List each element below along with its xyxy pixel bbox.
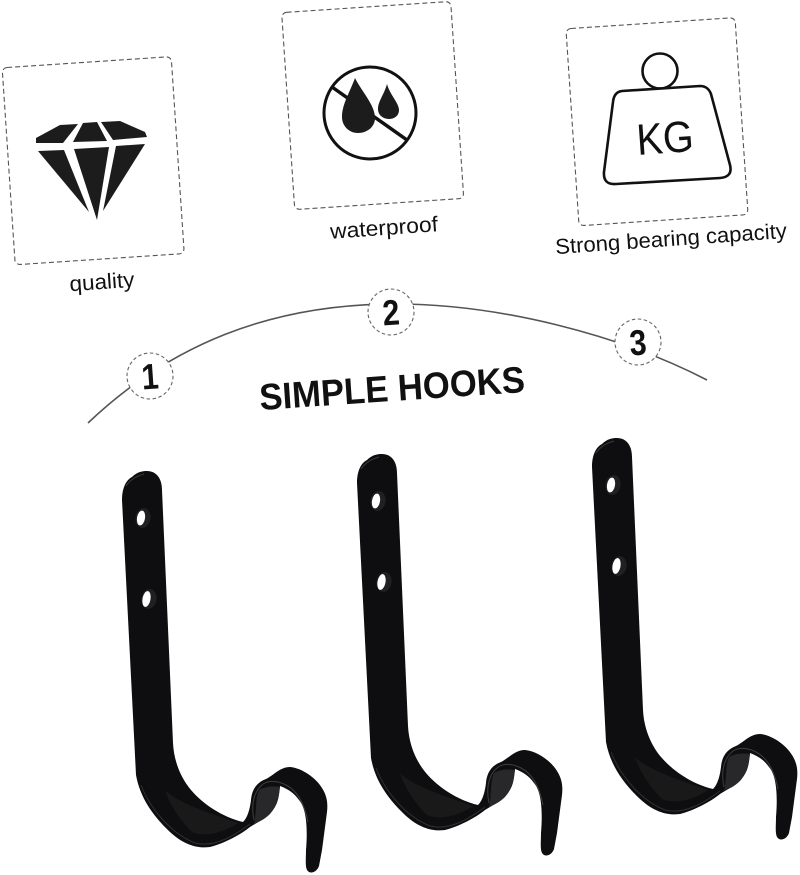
panel: waterproof <box>282 1 464 244</box>
arc timeline <box>88 304 707 423</box>
panel: strong bearing capacity <box>554 18 788 259</box>
step marker 1 <box>127 353 173 399</box>
icon: KG weight <box>604 54 731 184</box>
panel frame: quality <box>2 57 184 265</box>
label: strong bearing capacity: Strong bearing capacity <box>554 219 788 259</box>
step marker 2: 2 <box>381 291 401 334</box>
panel: quality <box>2 57 184 296</box>
panel frame: waterproof <box>282 1 464 210</box>
icon: diamond <box>36 121 147 220</box>
icon: KG weight: KG <box>635 112 695 165</box>
step marker 1: 1 <box>140 355 160 398</box>
icon: no water drops <box>324 67 416 159</box>
label: quality: quality <box>69 268 135 296</box>
panel frame: bearing capacity <box>566 18 748 226</box>
step marker 3 <box>615 319 661 365</box>
hook 2 <box>357 454 562 856</box>
step marker 3: 3 <box>628 321 648 364</box>
title: SIMPLE HOOKS <box>258 359 526 418</box>
hook 1 <box>122 471 327 873</box>
step marker 2 <box>368 289 414 335</box>
label: waterproof: waterproof <box>328 212 439 244</box>
hook 3 <box>592 438 797 840</box>
